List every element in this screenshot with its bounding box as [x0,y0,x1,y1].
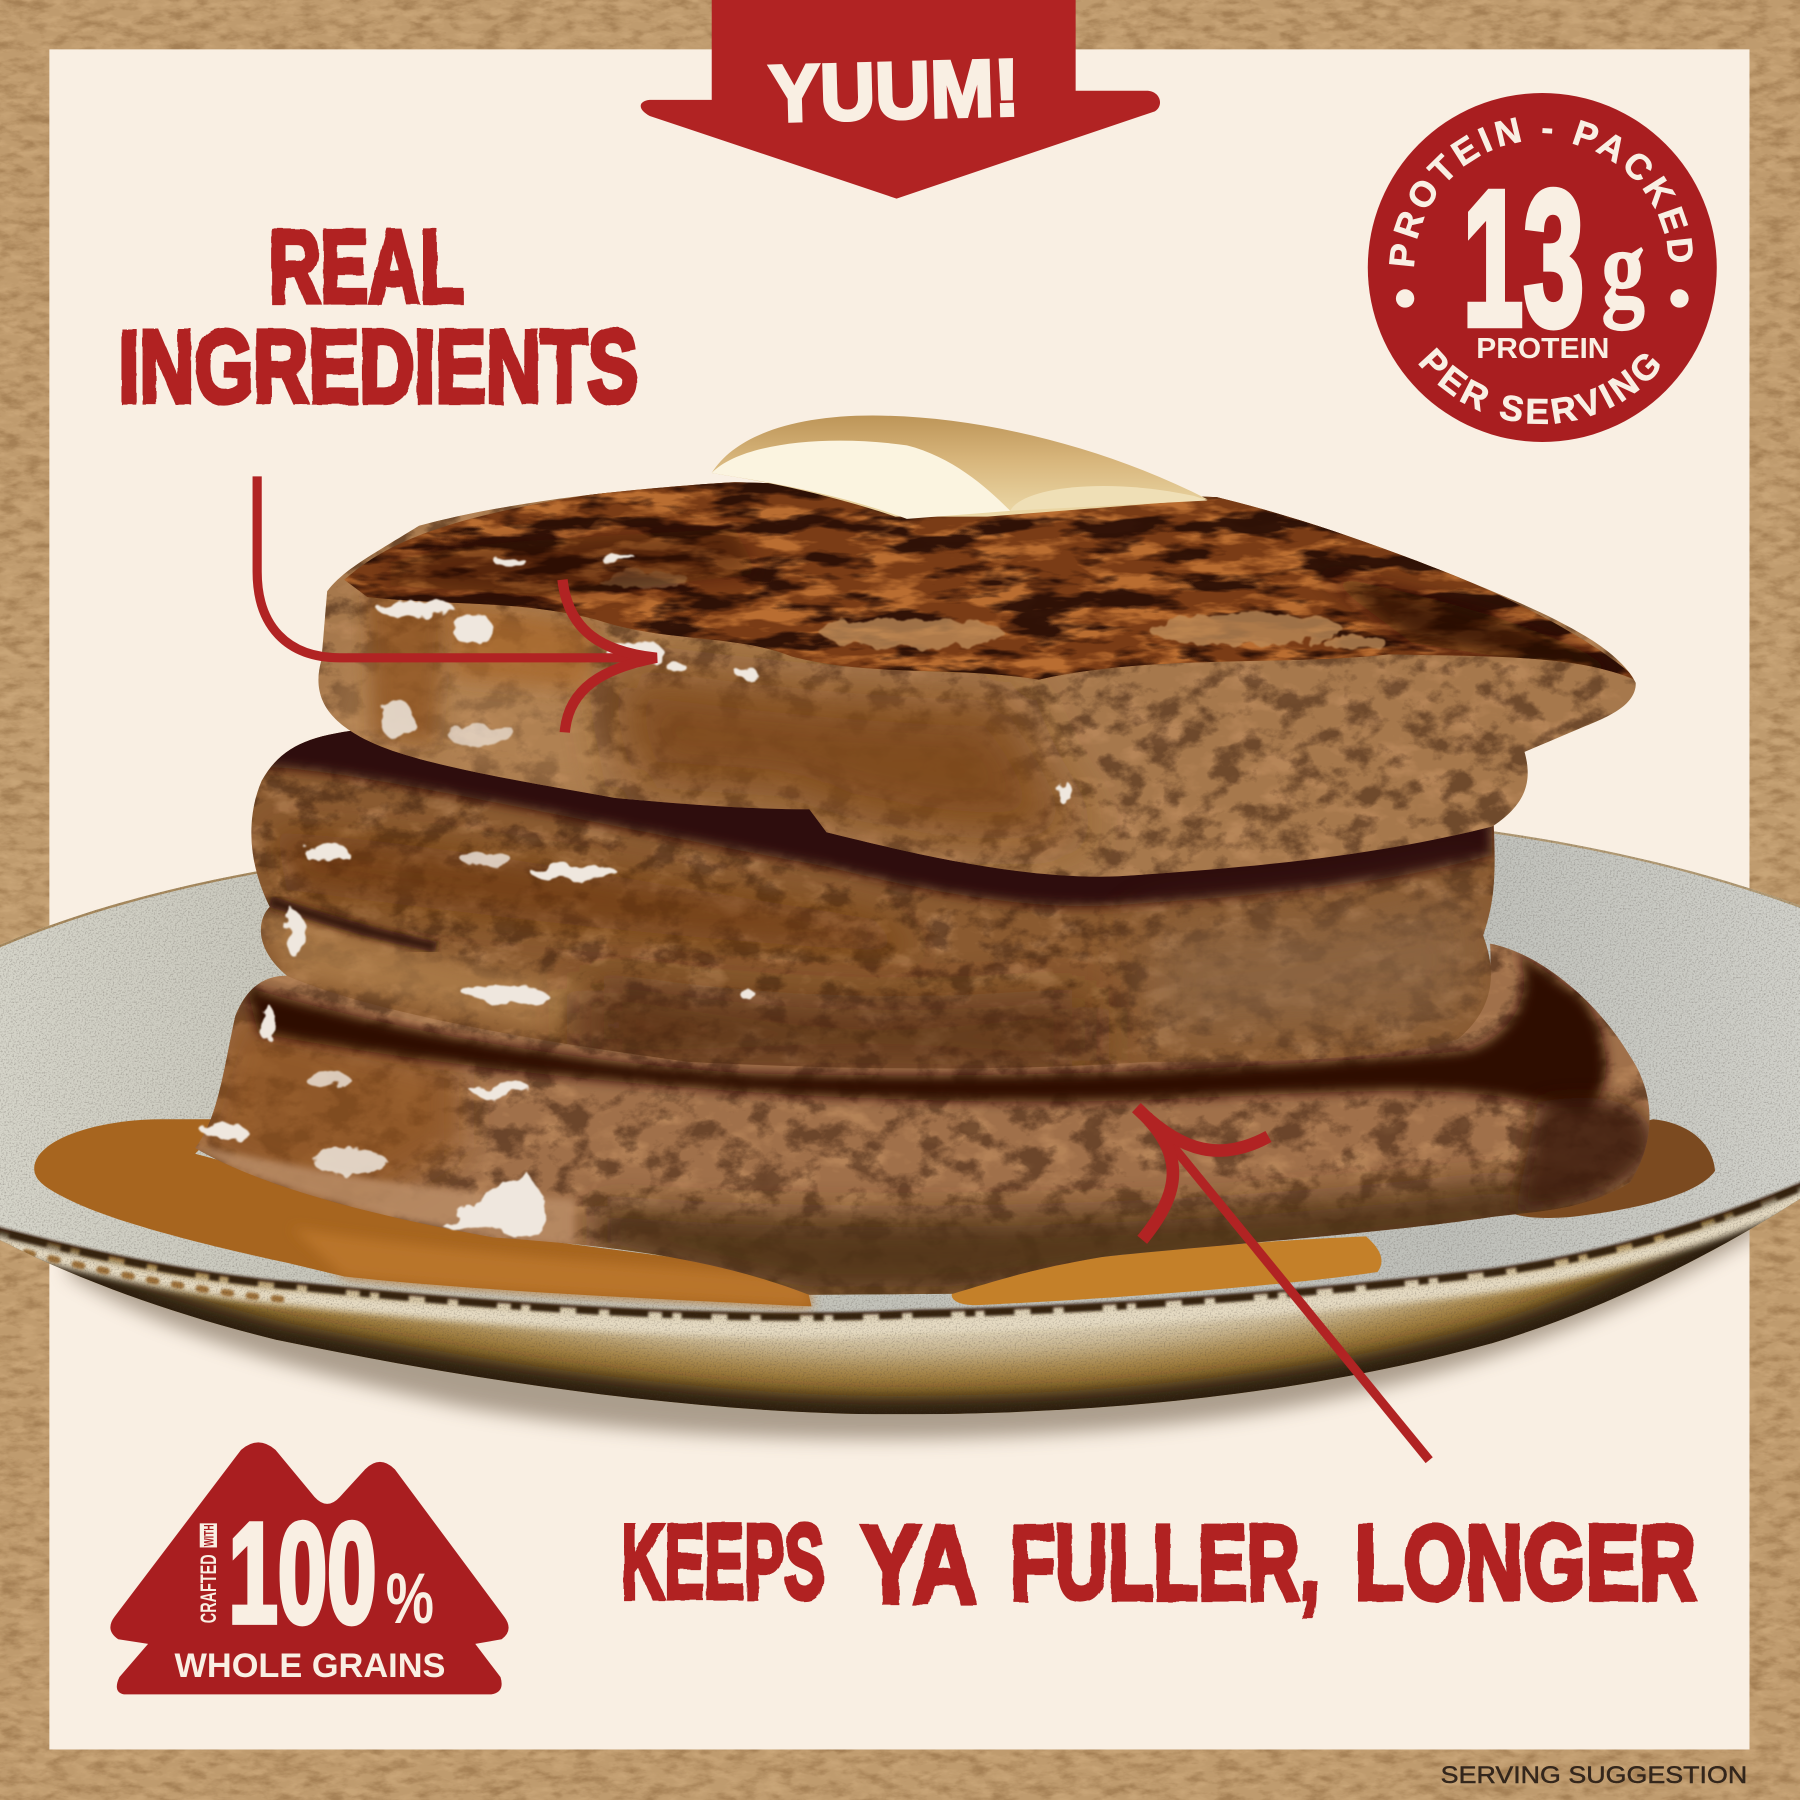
serving suggestion note: SERVING SUGGESTION [1441,1762,1747,1789]
plate shadow [69,1194,1756,1439]
left syrup pool [34,1119,812,1306]
top pancake [310,471,1653,895]
crafted with label: CRAFTED [196,1554,221,1623]
plate body [0,831,1800,1414]
badge curved bottom text: PER SERVING [1418,347,1660,424]
badge label: PROTEIN [1476,333,1609,365]
percent sign: % [386,1560,434,1639]
heading: keeps ya fuller longer: LONGER [1355,1504,1697,1622]
mountain shape [110,1442,509,1694]
middle pancake [251,730,1495,1068]
heading: keeps ya fuller longer [621,1503,1697,1627]
right syrup pool [1515,1119,1715,1218]
crafted with label: WITH [202,1524,217,1546]
arrow: fuller longer [1136,1108,1429,1460]
heading: real ingredients [118,208,638,424]
bottom pancake [172,941,1688,1309]
plate outer rim band [0,804,1800,1492]
heading: real ingredients: REAL [269,208,464,324]
badge curved top text: PROTEIN - PACKED [1389,117,1693,266]
protein badge [1368,93,1717,442]
whole grains badge [110,1442,509,1694]
100 figure: 100 [228,1494,377,1653]
pancake stack [172,471,1688,1309]
badge number: 13 [1463,150,1584,366]
badge dots [1396,289,1689,308]
banner text: YUUM! [768,43,1021,140]
badge disc [1368,93,1717,442]
badge unit: g [1601,206,1645,330]
plate [0,831,1800,1414]
butter pat [712,416,1208,519]
whole grains label: WHOLE GRAINS [174,1647,445,1685]
syrup pools [34,1119,1715,1306]
heading: keeps ya fuller longer: FULLER, [1010,1504,1320,1622]
heading: real ingredients: INGREDIENTS [118,308,638,424]
arrow: real ingredients [257,476,657,732]
arrow banner [641,0,1160,199]
centre syrup pool [952,1236,1381,1305]
heading: keeps ya fuller longer: KEEPS [621,1503,824,1621]
griddled top surface [344,482,1634,680]
heading: keeps ya fuller longer: YA [861,1504,977,1627]
banner shape [641,0,1160,199]
syrup glaze highlights [201,557,1068,1235]
